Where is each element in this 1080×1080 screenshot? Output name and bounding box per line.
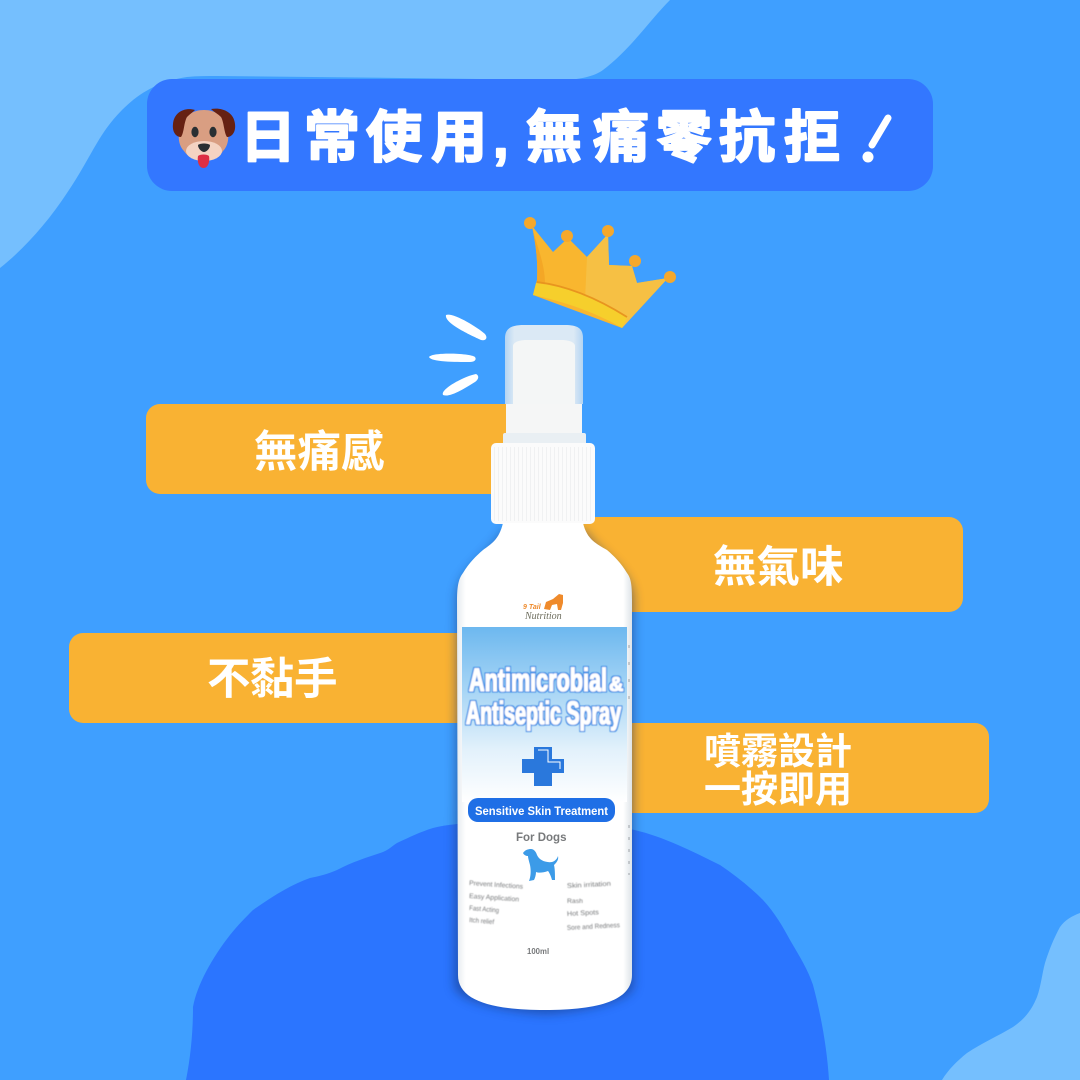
background blob: bottom right	[942, 913, 1080, 1080]
icon: dog face	[173, 109, 235, 168]
title banner	[147, 79, 933, 191]
indications right: Hot Spots	[567, 909, 600, 918]
treatment pill	[468, 798, 615, 822]
back label print edge	[628, 645, 630, 875]
product name: &	[609, 674, 623, 696]
indications left: Fast Acting	[469, 905, 500, 915]
brand logo: Nutrition	[524, 611, 562, 622]
icon: sparkle strokes	[429, 315, 486, 396]
indications right	[567, 881, 621, 932]
product: spray bottle	[457, 325, 632, 1010]
feature bar: 噴霧設計 一按即用: 一按即用	[704, 769, 852, 810]
product name: Antiseptic Spray	[466, 695, 621, 731]
product name: Antimicrobial	[469, 662, 607, 698]
feature bar: 噴霧設計 一按即用: 噴霧設計	[704, 731, 852, 772]
bottle shadow	[454, 530, 634, 1014]
indications left: Prevent Infections	[469, 880, 524, 891]
icon: medical cross	[522, 747, 564, 786]
feature bar: 無氣味	[560, 517, 963, 612]
volume: 100ml	[527, 947, 549, 956]
indications right: Skin irritation	[567, 881, 611, 890]
background blob: top left	[0, 0, 670, 268]
title text: 日常使用,無痛零抗拒	[240, 106, 840, 169]
indications left	[469, 880, 524, 926]
indications right: Sore and Redness	[567, 922, 621, 932]
feature bar: 無痛感: 無痛感	[254, 429, 384, 477]
icon: dog silhouette	[523, 849, 558, 881]
for dogs: For Dogs	[516, 832, 566, 844]
indications left: Itch relief	[469, 917, 494, 926]
background blob: bottom centre	[186, 824, 829, 1080]
title exclamation mark	[862, 118, 888, 162]
feature bar: 無痛感	[146, 404, 546, 494]
product name	[466, 662, 623, 731]
icon: crown	[524, 217, 676, 328]
feature bar: 不黏手: 不黏手	[207, 656, 338, 704]
bottle body	[457, 523, 632, 1010]
indications left: Easy Application	[469, 893, 519, 903]
label gradient	[462, 627, 627, 802]
brand logo	[523, 594, 563, 622]
brand logo: 9 Tail	[523, 604, 542, 611]
feature bar: 不黏手	[69, 633, 489, 723]
screw collar	[491, 443, 595, 524]
clear cap	[503, 325, 586, 446]
feature bar: 噴霧設計 一按即用	[600, 723, 989, 813]
feature bar: 無氣味: 無氣味	[713, 544, 844, 592]
treatment pill: Sensitive Skin Treatment	[475, 804, 608, 818]
indications right: Rash	[567, 898, 583, 905]
